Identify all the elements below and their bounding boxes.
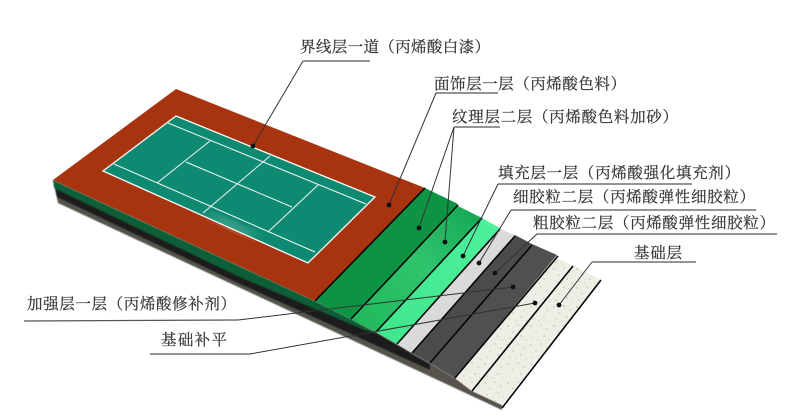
callout: coarse granule layer: 粗胶粒二层（丙烯酸弹性细胶粒） [533,213,775,232]
callout: base levelling [150,301,537,354]
surface layer: light green [376,218,500,344]
callout: surface layer: 面饰层一层（丙烯酸色料） [434,74,626,93]
callout: base levelling: 基础补平 [161,331,227,349]
callout: texture layer: 纹理层二层（丙烯酸色料加砂） [452,107,678,126]
surface layer: speckled one [456,258,573,391]
callout: reinforcing layer: 加强层一层（丙烯酸修补剂） [27,294,236,313]
callout: base layer: 基础层 [634,244,682,262]
surface layer: dark grey one [412,235,532,363]
surface layer: light grey [397,229,515,353]
callout: texture layer [417,107,678,244]
callout: base layer [557,244,696,307]
surface layer: dark grey two [430,244,557,378]
layer dividers [315,188,601,408]
callout: line layer: 界线层一道（丙烯酸白漆） [300,37,490,56]
callout: fine granule layer: 细胶粒二层（丙烯酸弹性细胶粒） [513,187,755,206]
surface layer: speckled two [473,266,601,405]
callout: surface layer [387,74,626,207]
surface layer: red border [53,89,425,301]
surface layer: dark green [315,188,458,319]
callout: coarse granule layer [493,213,777,275]
tennis court [103,116,375,263]
surface layer: texture green [351,206,482,332]
layered court slab [53,89,601,410]
callout: reinforcing layer [24,285,515,321]
callout: line layer [251,37,490,148]
callout: fine granule layer [477,187,756,265]
callout: filler layer [461,163,740,258]
callout: filler layer: 填充层一层（丙烯酸强化填充剂） [498,163,740,182]
slab side edge [53,180,502,410]
